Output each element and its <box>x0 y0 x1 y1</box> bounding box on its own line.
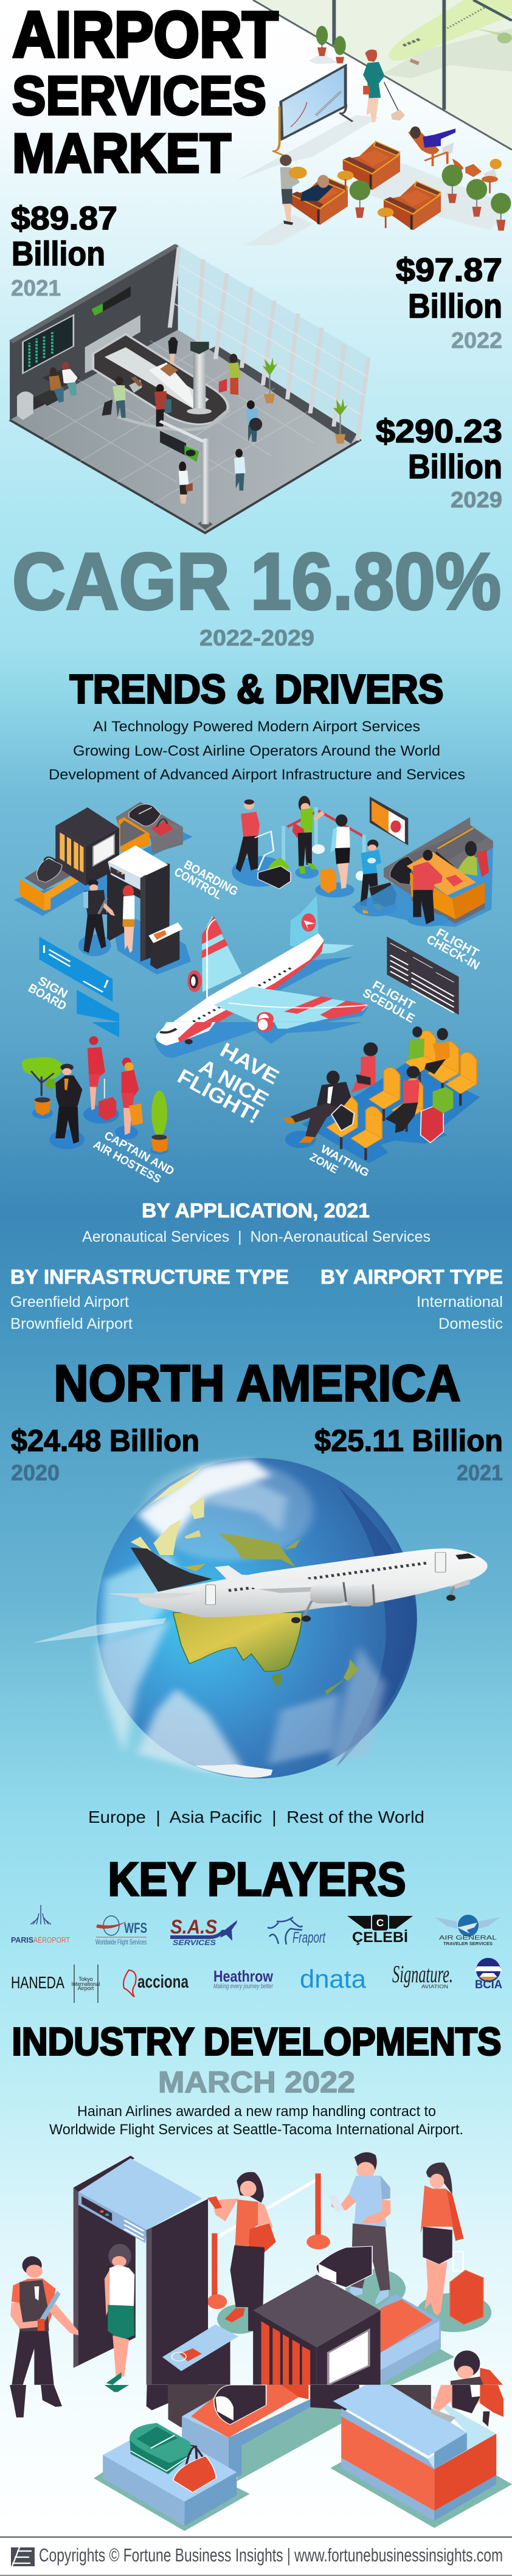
logo: signature aviation <box>392 1960 453 1989</box>
logo: paris aeroport <box>11 1905 70 1944</box>
floor shadows <box>235 53 512 245</box>
logo: haneda: Tokyo <box>78 1976 93 1982</box>
label: sign board: SIGN <box>36 974 70 1001</box>
check-in desk <box>333 2385 496 2521</box>
logo: heathrow <box>213 1967 274 1990</box>
illustration: airport lounge <box>235 0 512 245</box>
logo: sas services: S.A.S <box>170 1916 218 1938</box>
logo: air general: TRAVELER SERVICES <box>443 1942 493 1946</box>
conveyor block <box>182 2385 310 2488</box>
logo: haneda: Airport <box>78 1985 94 1991</box>
label: waiting zone: ZONE <box>308 1150 340 1176</box>
market value 2029: 2029 <box>451 487 502 512</box>
market value 2029: Billion <box>408 447 502 486</box>
CAGR: 2022-2029 <box>199 625 314 650</box>
logos: key players row two <box>11 1958 502 2003</box>
logo: wfs: Worldwide Flight Services <box>95 1938 147 1946</box>
hall walls and floor <box>9 244 370 533</box>
market value 2029 <box>376 413 502 512</box>
market value 2021: Billion <box>12 234 105 273</box>
label: flight schedule: SCEDULE <box>361 986 417 1026</box>
lower scene <box>10 2385 512 2531</box>
logo: signature aviation: AVIATION <box>421 1984 448 1989</box>
development description: Worldwide Flight Services at Seattle-Tacoma International Airport. <box>49 2122 463 2138</box>
man with boarding pass <box>316 2152 390 2305</box>
logo: acciona: acciona <box>137 1972 189 1992</box>
teal shadows <box>217 2269 491 2385</box>
logo: sas services <box>170 1916 237 1947</box>
logo: wfs: WFS <box>124 1920 147 1937</box>
illustration: airport scene upper <box>14 796 500 1025</box>
north america value 2020: $24.48 Billion <box>11 1424 199 1458</box>
metal detector <box>74 2156 208 2385</box>
continents <box>131 1467 359 1695</box>
logo: signature aviation: Signature. <box>392 1960 453 1988</box>
check-in board <box>370 796 408 846</box>
globe <box>96 1458 417 1778</box>
information board <box>272 66 353 155</box>
seated attendant <box>451 2350 503 2385</box>
development description <box>49 2103 463 2138</box>
segment: by airport type: Domestic <box>438 1315 503 1332</box>
segment: by infrastructure type: Greenfield Airport <box>10 1293 129 1311</box>
market value 2021: 2021 <box>11 276 61 301</box>
drivers list: Growing Low-Cost Airline Operators Around the World <box>73 743 440 759</box>
north america value 2021: 2021 <box>457 1460 503 1485</box>
label: flight check-in: FLIGHT <box>434 926 481 960</box>
drivers list <box>49 719 465 783</box>
label: boarding control: BOARDING <box>182 858 240 899</box>
airplane <box>108 1547 488 1623</box>
footer <box>0 2536 512 2576</box>
laptop users <box>408 127 502 193</box>
logo: bcia <box>474 1958 502 1991</box>
illustration: airport security and check-in <box>10 2152 512 2531</box>
segment: by application <box>82 1199 431 1245</box>
woman with suitcase <box>421 2162 483 2325</box>
sign boards <box>39 936 119 1022</box>
illustration: airport scene lower <box>22 1018 480 1163</box>
contrail <box>33 1618 167 1643</box>
market value 2022: $97.87 <box>396 252 502 288</box>
attendant at desk <box>433 2385 503 2426</box>
security guard <box>10 2256 78 2385</box>
check-in desk <box>351 817 500 927</box>
market value 2022: Billion <box>408 287 502 325</box>
logo: paris aeroport: PARIS <box>11 1935 33 1944</box>
north america value 2020 <box>11 1424 199 1485</box>
guard and passenger <box>78 880 134 956</box>
label: flight check-in: CHECK-IN <box>424 933 482 973</box>
green suitcase <box>130 2423 192 2474</box>
market value 2021: $89.87 <box>11 200 117 237</box>
date: march 2022: MARCH 2022 <box>158 2066 355 2099</box>
woman in metal detector <box>105 2244 134 2385</box>
logo: sas services: SERVICES <box>173 1938 216 1947</box>
baggage scanner <box>253 2274 441 2385</box>
logos: key players row one <box>11 1905 500 1947</box>
logo: air general: AIR GENERAL <box>439 1935 497 1941</box>
waiting zone <box>283 1026 480 1163</box>
passengers <box>102 337 262 504</box>
segment: by application: BY APPLICATION, 2021 <box>142 1199 370 1222</box>
potted plants <box>350 165 511 231</box>
market value 2022: 2022 <box>451 328 502 353</box>
woman with dog <box>363 49 405 123</box>
guard legs and column bases <box>10 2385 359 2429</box>
footer logo <box>11 2547 35 2566</box>
potted palms <box>263 358 348 444</box>
segment: by airport type: BY AIRPORT TYPE <box>320 1265 503 1288</box>
segment: by application: Aeronautical Services | Non-Aeronautical Services <box>82 1228 431 1245</box>
label: captain and air hostess: CAPTAIN AND <box>102 1129 176 1178</box>
metal detector gate <box>107 846 183 969</box>
label: waiting zone <box>308 1143 372 1179</box>
market value 2029: $290.23 <box>376 413 502 450</box>
airplane nose <box>91 1018 362 1058</box>
logo: celebi <box>347 1915 413 1946</box>
check-in queue <box>232 796 396 916</box>
logo: haneda: HANEDA <box>11 1973 64 1992</box>
heading: north america: NORTH AMERICA <box>54 1354 461 1412</box>
woman with ticket <box>207 2172 276 2331</box>
label: sign board: BOARD <box>26 981 69 1013</box>
teal floor shadows <box>94 2407 512 2531</box>
window and apron <box>253 0 512 150</box>
seated traveller and waitress <box>280 155 333 225</box>
label: have a nice flight: HAVE <box>216 1039 283 1089</box>
baggage carousel <box>93 334 229 430</box>
segment: by airport type: International <box>417 1293 503 1311</box>
logo: haneda: International <box>72 1981 100 1987</box>
label: boarding control: CONTROL <box>172 865 224 902</box>
label: have a nice flight: A NICE <box>195 1055 272 1112</box>
stanchions and rope <box>207 2173 330 2309</box>
label: have a nice flight <box>173 1039 283 1129</box>
red handbag <box>173 2446 216 2493</box>
title: MARKET <box>12 123 231 184</box>
passenger at desk <box>407 850 448 927</box>
wall signs and departures board <box>23 287 140 374</box>
upper scene <box>10 2152 503 2385</box>
logo: bcia: BCIA <box>475 1979 502 1991</box>
heading: key players: KEY PLAYERS <box>108 1852 406 1906</box>
drivers list: Development of Advanced Airport Infrastructure and Services <box>49 767 465 783</box>
baggage claim sign post <box>160 421 213 530</box>
front luggage block <box>103 2426 237 2526</box>
label: have a nice flight: FLIGHT! <box>173 1065 263 1129</box>
passenger airplane <box>173 896 368 1025</box>
label: waiting zone: WAITING <box>319 1143 372 1179</box>
north america value 2020: 2020 <box>11 1460 60 1485</box>
flight schedule board <box>387 936 458 1015</box>
label: captain and air hostess: AIR HOSTESS <box>91 1138 163 1186</box>
segment: by infrastructure type <box>10 1265 289 1332</box>
logo: dnata: dnata <box>300 1965 367 1993</box>
other regions: Europe | Asia Pacific | Rest of the World <box>88 1808 424 1826</box>
title: AIRPORT <box>12 0 278 71</box>
illustration: baggage claim hall <box>9 244 370 533</box>
development description: Hainan Airlines awarded a new ramp handling contract to <box>77 2103 436 2120</box>
ticket stand <box>162 2325 238 2385</box>
captain and air hostesses <box>22 1036 168 1155</box>
logo: acciona <box>123 1970 189 1997</box>
illustration: globe with airplane <box>33 1458 488 1778</box>
lounge chairs <box>291 141 441 230</box>
market value 2021 <box>11 200 117 301</box>
bench passengers <box>17 362 80 420</box>
segment: by infrastructure type: Brownfield Airport <box>10 1315 133 1332</box>
logo: fraport <box>268 1917 326 1946</box>
logo: celebi: C <box>376 1917 384 1929</box>
logo: wfs <box>95 1916 147 1946</box>
logo: fraport: Fraport <box>292 1929 326 1946</box>
logo: heathrow: Making every journey better <box>213 1983 274 1990</box>
logo: paris aeroport: AÉROPORT <box>33 1935 70 1944</box>
heading: trends and drivers: TRENDS & DRIVERS <box>69 667 444 712</box>
security scanner with conveyors <box>14 802 193 975</box>
north america value 2021: $25.11 Billion <box>314 1424 503 1458</box>
logo: heathrow: Heathrow <box>213 1967 274 1985</box>
market value 2022 <box>396 252 502 353</box>
logo: air general <box>435 1915 500 1946</box>
segment: by infrastructure type: BY INFRASTRUCTURE TYPE <box>10 1265 289 1288</box>
segment: by airport type <box>320 1265 503 1332</box>
plants near window <box>316 26 346 63</box>
title <box>12 0 278 184</box>
north america value 2021 <box>314 1424 503 1485</box>
drivers list: AI Technology Powered Modern Airport Services <box>93 719 420 735</box>
label: flight schedule: FLIGHT <box>370 978 417 1012</box>
logo: celebi: ÇELEBİ <box>352 1929 408 1946</box>
globe lower rim and ice cap <box>195 1764 272 1778</box>
title: SERVICES <box>12 66 266 127</box>
logo: haneda <box>11 1965 100 2003</box>
